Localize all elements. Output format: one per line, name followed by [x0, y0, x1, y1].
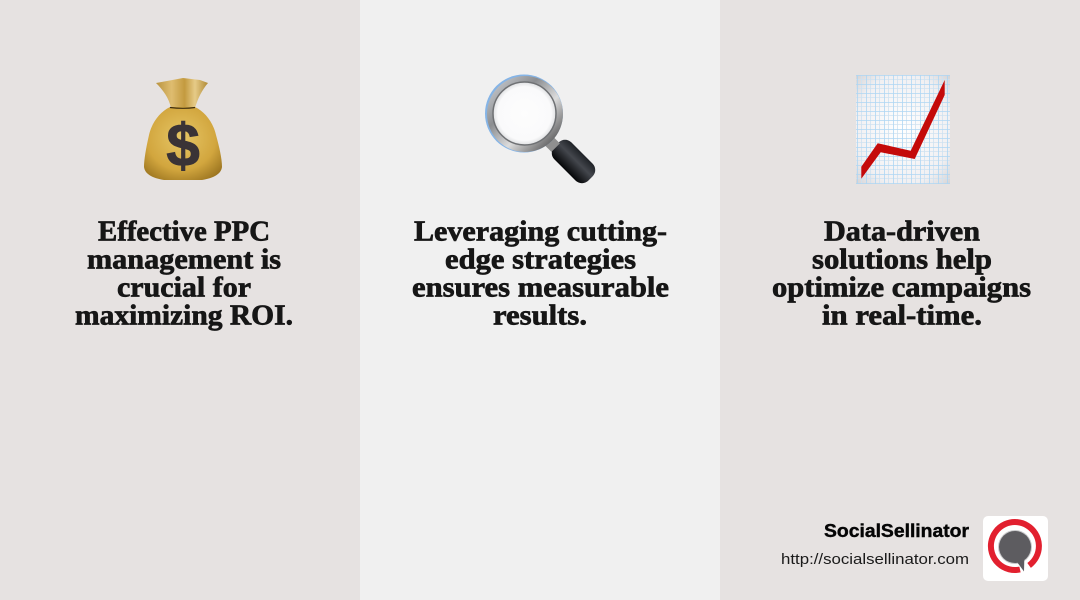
heading: middle panel [412, 216, 669, 332]
icon: dollar sign: $ [166, 112, 200, 179]
heading: middle panel: Leveraging cutting- [414, 216, 667, 248]
heading: right panel [772, 216, 1031, 332]
heading: right panel: Data-driven [824, 216, 980, 248]
icon: magnifying glass [485, 74, 599, 187]
panel: left background [0, 0, 360, 600]
panel: middle background [360, 0, 720, 600]
heading: right panel: in real-time. [822, 300, 982, 332]
heading: right panel: optimize campaigns [772, 272, 1031, 304]
icon: money bag [144, 78, 222, 180]
heading: left panel [75, 216, 293, 332]
brand url: http://socialsellinator.com [781, 551, 969, 568]
heading: left panel: Effective PPC [98, 216, 270, 248]
icon: rising chart [856, 75, 950, 184]
heading: middle panel: results. [493, 300, 587, 332]
heading: left panel: maximizing ROI. [75, 300, 293, 332]
brand name: SocialSellinator [824, 521, 969, 541]
heading: left panel: crucial for [117, 272, 251, 304]
heading: middle panel: edge strategies [445, 244, 636, 276]
heading: left panel: management is [87, 244, 281, 276]
logo [983, 516, 1048, 581]
handle [548, 136, 599, 187]
heading: middle panel: ensures measurable [412, 272, 669, 304]
heading: right panel: solutions help [812, 244, 992, 276]
panel: right background [720, 0, 1080, 600]
